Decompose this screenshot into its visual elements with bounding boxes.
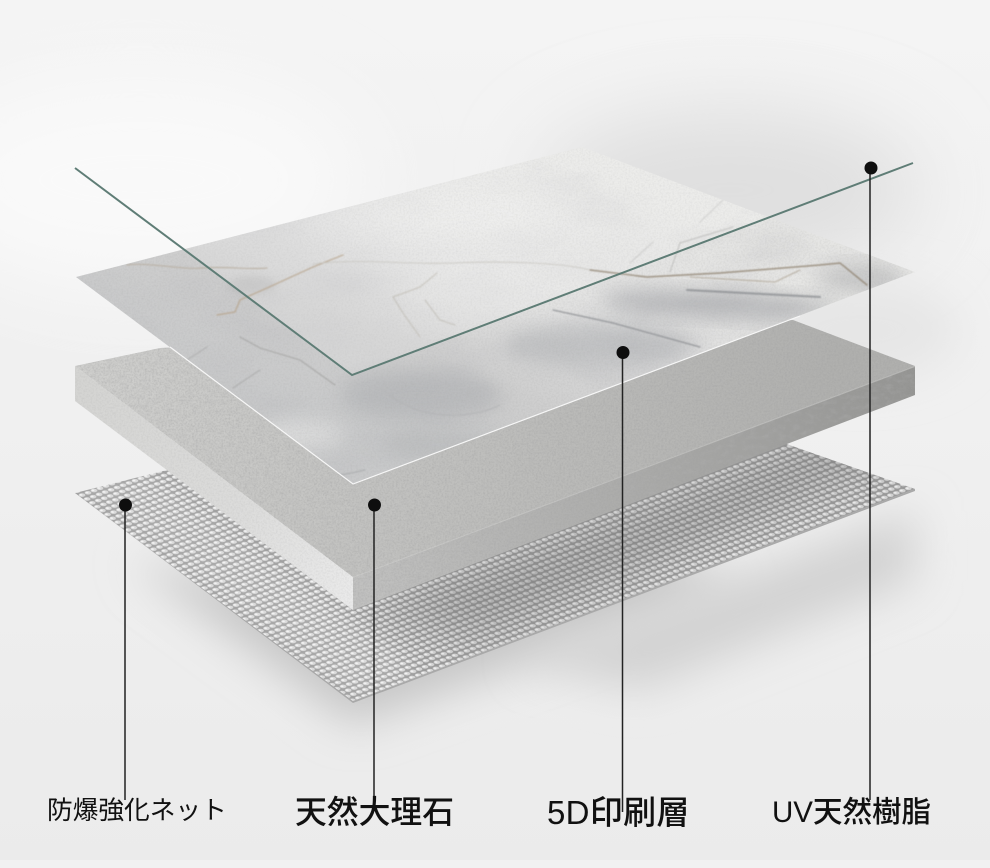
layer: 5D printed marble <box>76 152 914 484</box>
label: reinforcing mesh: 防爆強化ネット <box>47 796 227 825</box>
label: UV natural resin: UV天然樹脂 <box>772 796 931 829</box>
board left side <box>75 366 353 610</box>
layer: cement board <box>70 315 925 615</box>
callout: mesh leader <box>119 498 132 800</box>
drop shadow beneath the mesh <box>130 510 915 725</box>
callout: marble board leader <box>368 498 381 800</box>
layer: explosion-proof reinforcing mesh <box>75 444 915 703</box>
layer: UV resin glass sheet <box>75 163 913 375</box>
board top face <box>75 320 915 577</box>
board front side <box>353 366 915 610</box>
marble veins <box>127 200 867 476</box>
callout: print layer leader <box>616 346 630 812</box>
label: natural marble: 天然大理石 <box>295 794 454 830</box>
glass brightening over marble <box>186 224 448 374</box>
callout: UV resin leader <box>864 162 878 800</box>
label: 5D print layer: 5D印刷層 <box>547 794 690 831</box>
marble white lower edge <box>170 316 800 484</box>
